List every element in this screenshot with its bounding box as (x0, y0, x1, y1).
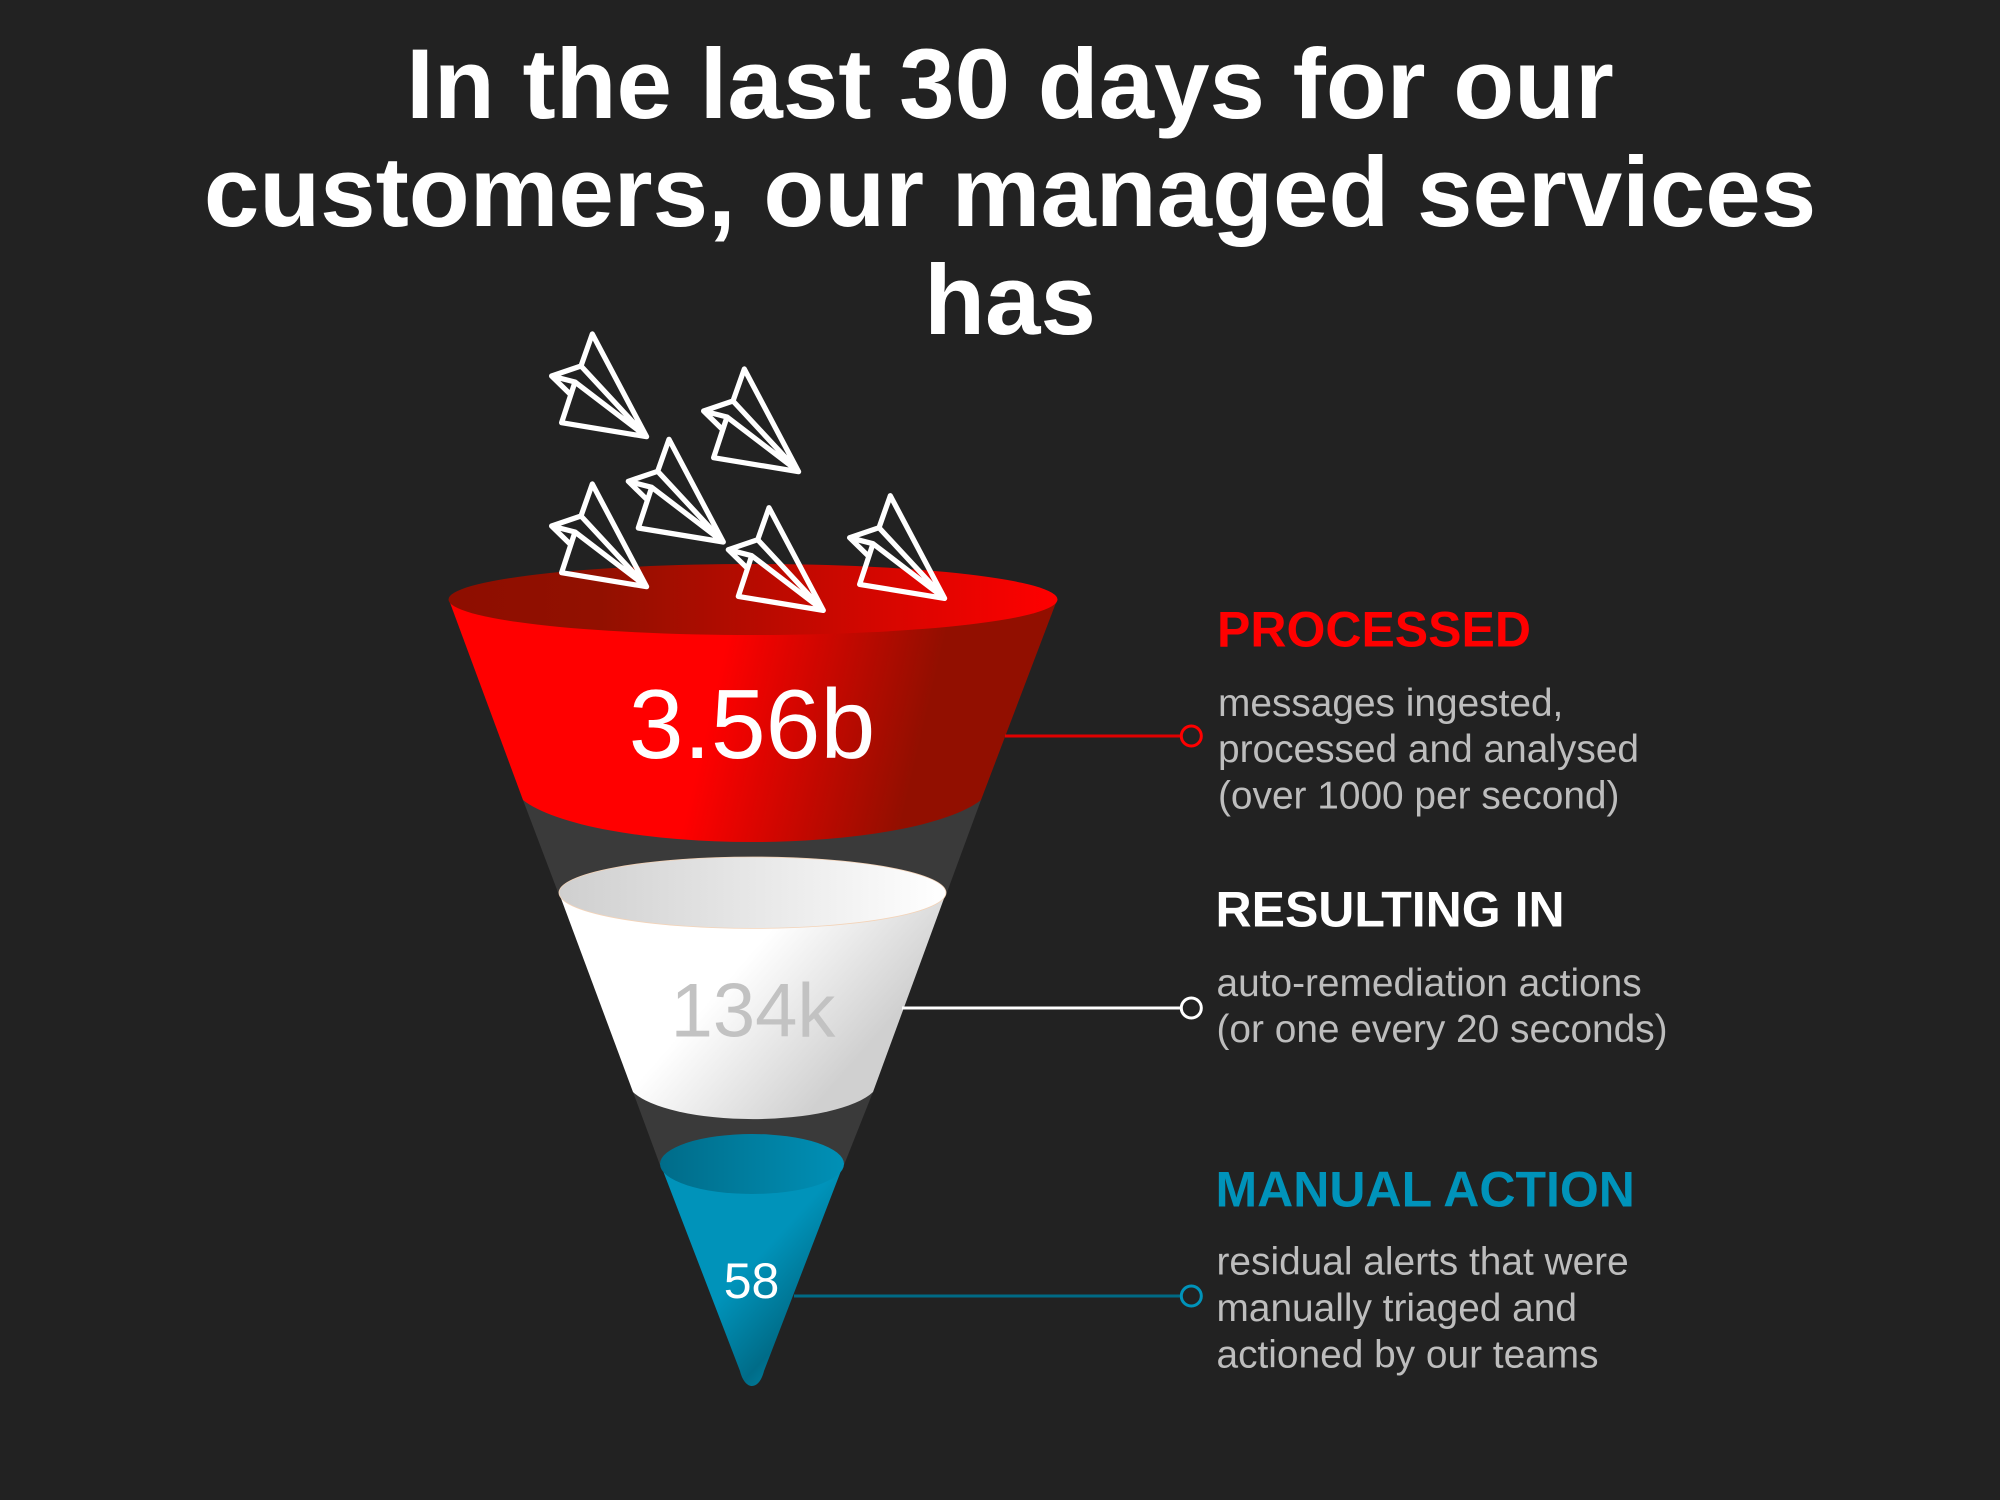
icon: paper plane 3 (628, 439, 723, 542)
description: resulting in: auto-remediation actions (1216, 962, 1642, 1005)
description: resulting in (1216, 962, 1668, 1051)
description: processed: (over 1000 per second) (1218, 774, 1619, 818)
value: 3.56b: 3.56b (629, 669, 875, 779)
connector: processed (1005, 726, 1201, 746)
title: In the last 30 days for our (406, 29, 1614, 140)
funnel segment: red (448, 564, 1058, 842)
icon: paper plane 4 (552, 484, 647, 587)
description: manual action (1216, 1240, 1629, 1376)
description: processed: processed and analysed (1218, 728, 1639, 771)
value: 58: 58 (724, 1253, 779, 1309)
funnel segment: blue (660, 1134, 844, 1386)
icon: paper plane 6 (850, 496, 945, 598)
funnel gap: lower (633, 1092, 873, 1165)
heading: resulting in: RESULTING IN (1216, 882, 1565, 938)
description: manual action: manually triaged and (1216, 1287, 1577, 1330)
connector: manual action (794, 1286, 1201, 1306)
description: manual action: residual alerts that were (1216, 1240, 1629, 1284)
heading: manual action: MANUAL ACTION (1216, 1162, 1635, 1218)
text block: resulting in (1216, 882, 1668, 1051)
title: customers, our managed services (204, 137, 1816, 248)
heading: processed: PROCESSED (1217, 602, 1531, 658)
funnel gap: upper (523, 800, 981, 895)
description: resulting in: (or one every 20 seconds) (1216, 1008, 1668, 1051)
funnel segment: white (559, 857, 946, 1119)
text block: manual action (1216, 1162, 1635, 1376)
connector: resulting in (902, 998, 1201, 1018)
title (204, 29, 1816, 356)
icon: paper plane 2 (704, 369, 799, 472)
description: manual action: actioned by our teams (1216, 1334, 1599, 1376)
icon: paper plane 5 (728, 508, 823, 610)
funnel (448, 564, 1058, 1386)
text block: processed (1217, 602, 1639, 818)
icon: paper plane 1 (552, 334, 647, 437)
value: 134k: 134k (671, 968, 836, 1054)
description: processed: messages ingested, (1218, 682, 1563, 725)
title: has (924, 245, 1096, 356)
description: processed (1218, 682, 1639, 818)
paper planes (552, 334, 945, 610)
